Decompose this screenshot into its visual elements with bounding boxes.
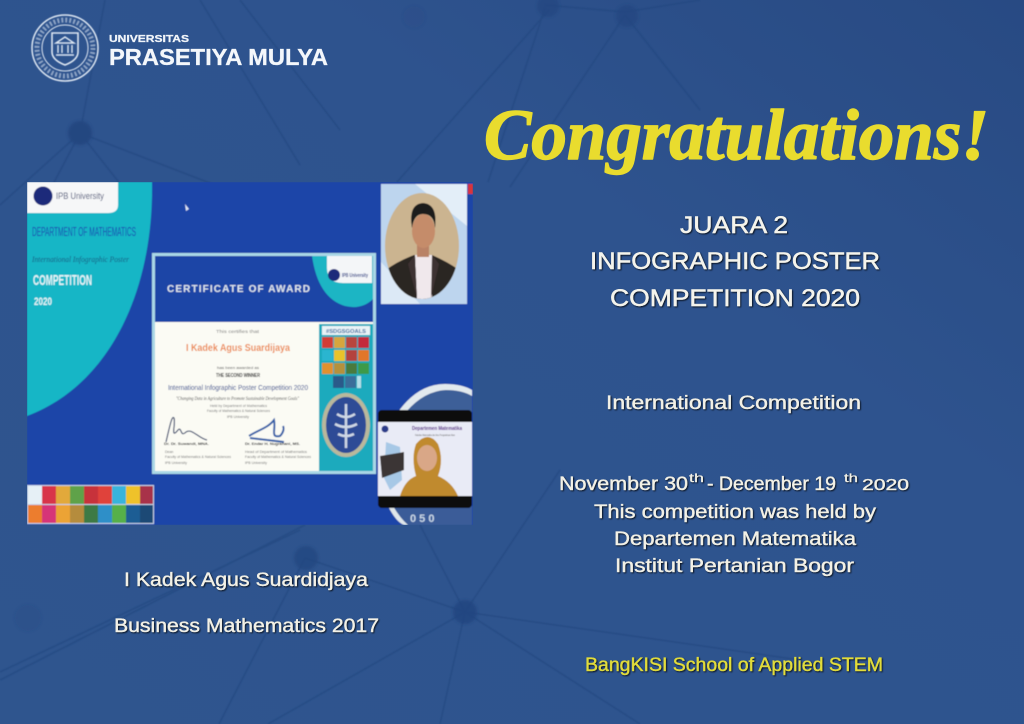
video thumbnail: presenter: Departemen Matematika <box>412 426 462 432</box>
competition details: - December 19 <box>707 474 836 495</box>
certificate: Faculty of Mathematics & Natural Sciences <box>207 409 270 413</box>
video thumbnail: presenter: Fakultas Matematika dan Ilmu Pengetahuan Alam <box>415 434 455 437</box>
teal side banner: COMPETITION <box>33 272 92 289</box>
certificate: International Infographic Poster Competition 2020 <box>168 385 308 392</box>
cursor <box>185 204 189 211</box>
caption: student name: I Kadek Agus Suardidjaya <box>124 570 368 591</box>
certificate: Head of Department of Mathematics <box>245 450 307 454</box>
logo: Universitas Prasetiya Mulya <box>32 15 328 81</box>
icon: university seal <box>32 15 98 81</box>
teal side banner: IPB University <box>56 191 104 201</box>
competition details: th <box>844 471 858 485</box>
panel: certificate screenshot <box>27 182 473 525</box>
competition details: th <box>689 471 704 485</box>
logo wordmark small: UNIVERSITAS <box>109 33 189 45</box>
certificate: "Changing Data in Agriculture to Promote Sustainable Development Goals" <box>176 396 300 402</box>
certificate: Faculty of Mathematics & Natural Sciences <box>165 455 231 459</box>
speaker photo: man <box>381 184 467 304</box>
award title: COMPETITION 2020 <box>610 285 860 312</box>
competition details: November 30 <box>559 474 688 495</box>
award title: JUARA 2 <box>680 212 788 239</box>
certificate: Held by Department of Mathematics <box>210 404 267 408</box>
competition level: International Competition <box>606 393 861 414</box>
certificate: Dean <box>165 450 173 454</box>
globe seal behind video <box>388 384 472 525</box>
competition details <box>559 471 909 577</box>
teal side banner: 2020 <box>34 296 52 308</box>
SDG icon strip <box>27 485 154 524</box>
organizer: BangKISI School of Applied STEM <box>585 655 883 676</box>
certificate: Faculty of Mathematics & Natural Sciences <box>245 455 311 459</box>
teal side banner: International Infographic Poster <box>31 255 130 264</box>
certificate: I Kadek Agus Suardijaya <box>186 343 290 354</box>
video thumbnail: presenter <box>378 410 472 508</box>
heading: Congratulations: Congratulations! <box>484 95 989 175</box>
certificate: THE SECOND WINNER <box>216 373 260 379</box>
certificate: IPB University <box>165 461 187 465</box>
competition details: 2020 <box>862 477 909 494</box>
globe seal behind video: 0 5 0 <box>410 513 434 525</box>
certificate: #SDGSGOALS <box>326 329 366 335</box>
competition details: Departemen Matematika <box>614 529 856 550</box>
certificate <box>152 253 376 474</box>
logo wordmark large: PRASETIYA MULYA <box>109 44 328 70</box>
certificate: IPB University <box>227 415 249 419</box>
certificate: has been awarded as <box>217 365 259 370</box>
teal side banner: DEPARTMENT OF MATHEMATICS <box>32 225 136 239</box>
certificate: Dr. Dr. Suwandi, MNA. <box>164 441 209 446</box>
certificate: Dr. Endar H. Nugrahani, MS. <box>245 441 300 446</box>
certificate: IPB University <box>342 273 368 279</box>
certificate: IPB University <box>245 461 267 465</box>
award title: INFOGRAPHIC POSTER <box>590 248 880 275</box>
caption: study program: Business Mathematics 2017 <box>114 616 379 637</box>
teal side banner <box>27 182 152 416</box>
record indicator <box>468 184 473 194</box>
competition details: This competition was held by <box>594 502 877 523</box>
competition details: Institut Pertanian Bogor <box>615 556 855 577</box>
certificate: This certifies that <box>216 329 260 334</box>
award title <box>590 212 880 312</box>
certificate: CERTIFICATE OF AWARD <box>167 284 310 295</box>
